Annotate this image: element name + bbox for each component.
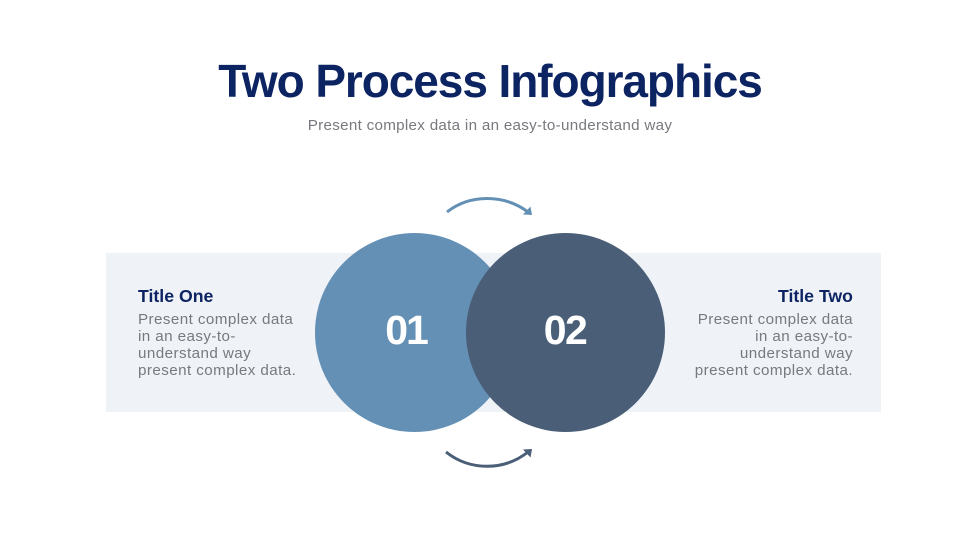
body: title one: understand way: [138, 345, 251, 362]
circle 02: [466, 233, 665, 432]
number 02: 02: [544, 307, 586, 353]
body: title one: Present complex data: [138, 310, 293, 328]
heading: title one: Title One: [138, 286, 213, 306]
body: title two: in an easy-to-: [755, 328, 853, 345]
number 01: 01: [385, 307, 427, 353]
body: title two: present complex data.: [695, 362, 853, 379]
body: title two: Present complex data: [698, 310, 853, 328]
title: Two Process Infographics: [218, 55, 762, 107]
body: title two: understand way: [740, 345, 853, 362]
subtitle: Present complex data in an easy-to-understand way: [308, 117, 672, 134]
body: title two: [695, 310, 853, 379]
heading: title two: Title Two: [778, 286, 853, 306]
body: title one: present complex data.: [138, 362, 296, 379]
background band: [106, 253, 881, 412]
body: title one: in an easy-to-: [138, 328, 236, 345]
circle 01: [315, 233, 514, 432]
body: title one: [138, 310, 296, 379]
text block: title one: [138, 286, 296, 379]
arrow: bottom: [445, 449, 532, 468]
arrow: top: [446, 197, 532, 215]
text block: title two: [695, 286, 853, 379]
